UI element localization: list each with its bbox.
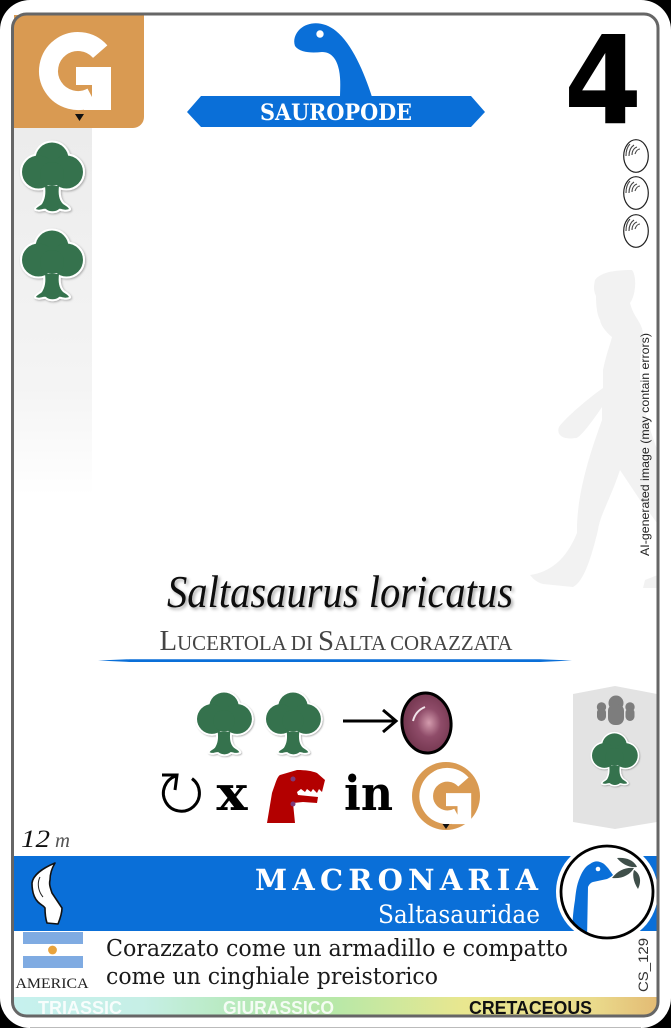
arrow — [343, 710, 396, 732]
body length — [21, 826, 70, 853]
icon: era G — [49, 42, 111, 110]
word in: in — [344, 766, 393, 822]
icon: era G badge — [412, 762, 480, 830]
image disclaimer: AI-generated image (may contain errors) — [638, 333, 652, 556]
ability row 2 — [162, 762, 480, 830]
icon: egg 2 — [624, 177, 648, 209]
icon: habitat tree 2 — [22, 230, 83, 299]
sauropod heading — [187, 23, 485, 127]
body length: m — [55, 828, 70, 852]
title underline — [98, 659, 572, 662]
description — [106, 936, 568, 990]
category banner — [187, 96, 485, 127]
era: Jurassic: GIURASSICO — [223, 998, 334, 1018]
left habitat strip — [14, 128, 92, 496]
icon: red t-rex head — [267, 770, 325, 823]
icon: Argentina flag — [23, 932, 83, 968]
multiplication sign: x — [216, 766, 248, 822]
era: Cretaceous: CRETACEOUS — [469, 998, 592, 1018]
scientific name: Saltasaurus loricatus — [167, 566, 513, 617]
badge ring — [561, 846, 653, 938]
icon: eye — [596, 867, 600, 871]
icon: cost tree 1 — [197, 692, 252, 754]
ability row 1 — [197, 691, 454, 755]
cost number: 4 — [564, 10, 642, 152]
description: Corazzato come un armadillo e compatto — [106, 936, 568, 962]
icon: egg 1 — [624, 140, 648, 172]
icon: sauropod head — [294, 23, 372, 97]
card code: CS_129 — [635, 938, 651, 992]
human scale silhouette — [530, 270, 665, 590]
family name: Saltasauridae — [378, 900, 540, 929]
icon: habitat tree 1 — [22, 142, 83, 211]
egg counters — [624, 140, 648, 247]
icon: sauropod in circle — [572, 861, 613, 932]
icon: leaves — [612, 858, 640, 889]
clade band — [14, 856, 657, 931]
continent label: AMERICA — [16, 976, 89, 992]
icon: egg 3 — [624, 215, 648, 247]
description: come un cinghiale preistorico — [106, 964, 438, 990]
icon: maroon egg — [399, 691, 454, 755]
era tile — [14, 15, 144, 128]
clade name: MACRONARIA — [255, 863, 538, 897]
common name: LUCERTOLA DI SALTA CORAZZATA — [160, 625, 513, 657]
icon: panel tree — [592, 733, 638, 785]
icon: cost tree 2 — [266, 692, 321, 754]
category label: SAUROPODE — [260, 100, 412, 126]
icon: herd — [597, 696, 635, 725]
icon: claw — [32, 863, 62, 924]
icon: repeat arrow — [162, 775, 199, 811]
geologic timeline — [14, 997, 656, 1014]
era: Triassic: TRIASSIC — [38, 998, 122, 1018]
clade badge — [556, 841, 658, 943]
body length: 12 — [21, 826, 50, 853]
habitat side panel — [573, 686, 657, 829]
icon: era tile marker — [75, 114, 84, 121]
icon: eye — [316, 30, 324, 38]
